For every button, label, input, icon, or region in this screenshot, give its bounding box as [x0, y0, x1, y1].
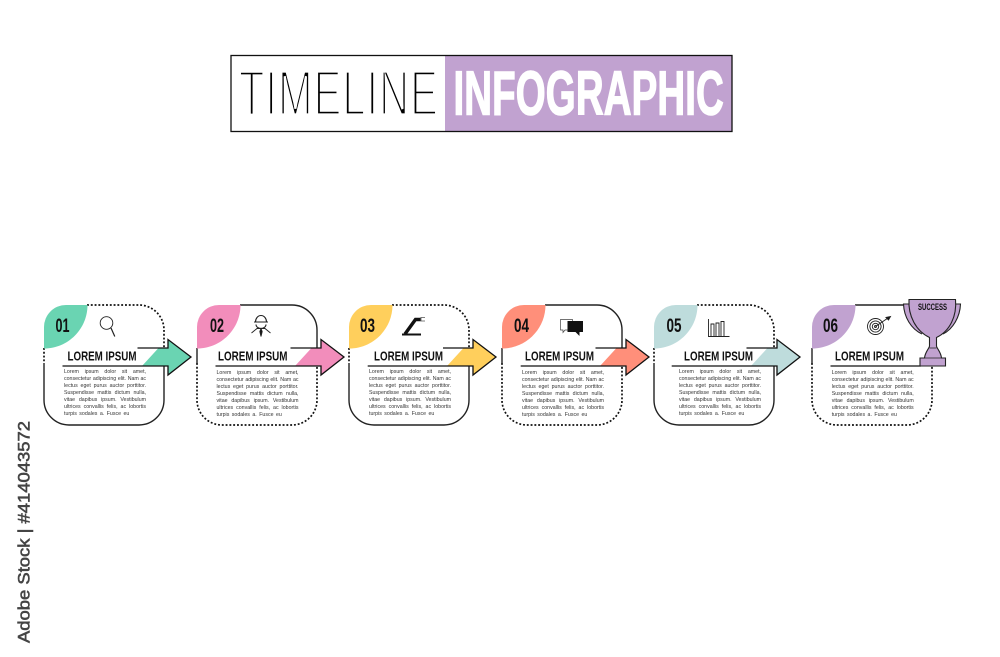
arrow [521, 340, 649, 375]
text block: turpis sodales a. Fusce eu [369, 411, 434, 417]
number badge: 03 [360, 316, 375, 336]
icon: bar chart [708, 318, 730, 336]
text block: ultrices convallis felis, ac lobortis [216, 404, 298, 410]
heading: LOREM IPSUM [835, 348, 904, 364]
text block: ultrices convallis felis, ac lobortis [64, 404, 146, 410]
panel: step 04 [501, 304, 650, 426]
icon: worker with helmet [251, 316, 270, 336]
text block: lectus eget purus auctor porttitor. [216, 384, 298, 390]
heading: LOREM IPSUM [67, 348, 136, 363]
title: INFOGRAPHIC: INFOGRAPHIC [454, 58, 724, 128]
number badge [349, 304, 392, 348]
panel: step 02 [196, 304, 345, 426]
number badge: 02 [210, 316, 224, 337]
icon: success trophy: SUCCESS [918, 302, 947, 312]
text block: vitae dapibus ipsum. Vestibulum [522, 398, 604, 404]
panel: step 01 [43, 304, 192, 426]
text block: Lorem ipsum dolor sit amet, [832, 370, 914, 376]
text block: Suspendisse mattis dictum nulla, [216, 390, 298, 396]
icon: magnifier [100, 316, 114, 336]
arrow [62, 339, 190, 374]
text block: turpis sodales a. Fusce eu [64, 411, 129, 417]
text block [369, 369, 451, 417]
panel: step 03 [348, 304, 497, 426]
text block: Suspendisse mattis dictum nulla, [679, 390, 761, 396]
text block: vitae dapibus ipsum. Vestibulum [216, 398, 298, 404]
text block: Suspendisse mattis dictum nulla, [64, 390, 146, 396]
text block: Suspendisse mattis dictum nulla, [522, 390, 604, 396]
text block: lectus eget purus auctor porttitor. [522, 384, 604, 390]
icon: chat bubbles [560, 320, 583, 336]
text block: ultrices convallis felis, ac lobortis [679, 404, 761, 410]
text block: vitae dapibus ipsum. Vestibulum [369, 397, 451, 403]
text block: turpis sodales a. Fusce eu [832, 412, 897, 418]
text block: vitae dapibus ipsum. Vestibulum [64, 397, 146, 403]
heading: LOREM IPSUM [525, 348, 594, 364]
text block: lectus eget purus auctor porttitor. [369, 383, 451, 389]
stock id side label: Adobe Stock | #414043572 [16, 421, 34, 643]
heading: LOREM IPSUM [218, 348, 287, 364]
text block: lectus eget purus auctor porttitor. [64, 383, 146, 389]
heading: LOREM IPSUM [374, 348, 443, 363]
number badge: 04 [514, 316, 529, 337]
text block: turpis sodales a. Fusce eu [679, 411, 744, 417]
text block [679, 369, 761, 417]
number badge: 01 [55, 316, 69, 336]
number badge [44, 304, 87, 348]
text block: lectus eget purus auctor porttitor. [679, 383, 761, 389]
text block: consectetur adipiscing elit. Nam ac [64, 376, 146, 382]
number badge [654, 304, 698, 348]
number badge [812, 305, 855, 348]
text block: Lorem ipsum dolor sit amet, [522, 370, 604, 376]
arrow [215, 340, 344, 375]
arrow [368, 339, 496, 374]
icon: success trophy [902, 299, 962, 366]
text block: Suspendisse mattis dictum nulla, [369, 390, 451, 396]
text block [832, 370, 914, 418]
heading: LOREM IPSUM [684, 348, 753, 363]
text block: ultrices convallis felis, ac lobortis [369, 404, 451, 410]
text block: turpis sodales a. Fusce eu [216, 412, 282, 418]
text block: lectus eget purus auctor porttitor. [832, 384, 914, 390]
arrow [672, 339, 800, 374]
number badge [196, 305, 240, 348]
title: TIMELINE: TIMELINE [239, 58, 438, 129]
text block: Lorem ipsum dolor sit amet, [679, 369, 761, 375]
text block: ultrices convallis felis, ac lobortis [522, 404, 604, 410]
number badge [502, 305, 546, 348]
panel: step 06 [811, 304, 933, 426]
text block: Lorem ipsum dolor sit amet, [216, 370, 298, 376]
panel: step 05 [653, 304, 801, 426]
text block [64, 369, 146, 417]
text block: Lorem ipsum dolor sit amet, [369, 369, 451, 375]
text block: vitae dapibus ipsum. Vestibulum [679, 397, 761, 403]
icon: target [867, 316, 890, 334]
text block: consectetur adipiscing elit. Nam ac [832, 376, 914, 382]
text block: turpis sodales a. Fusce eu [522, 412, 587, 418]
text block: consectetur adipiscing elit. Nam ac [216, 376, 298, 382]
text block: Lorem ipsum dolor sit amet, [64, 369, 146, 375]
text block: ultrices convallis felis, ac lobortis [832, 404, 914, 410]
text block: consectetur adipiscing elit. Nam ac [679, 376, 761, 382]
title banner [230, 54, 733, 132]
number badge: 06 [823, 316, 838, 337]
number badge: 05 [666, 316, 682, 336]
text block [522, 370, 604, 418]
text block: Suspendisse mattis dictum nulla, [832, 390, 914, 396]
icon: robot arm [402, 317, 425, 334]
text block: consectetur adipiscing elit. Nam ac [369, 376, 451, 382]
text block: vitae dapibus ipsum. Vestibulum [832, 398, 914, 404]
text block: consectetur adipiscing elit. Nam ac [522, 376, 604, 382]
text block [216, 370, 298, 418]
